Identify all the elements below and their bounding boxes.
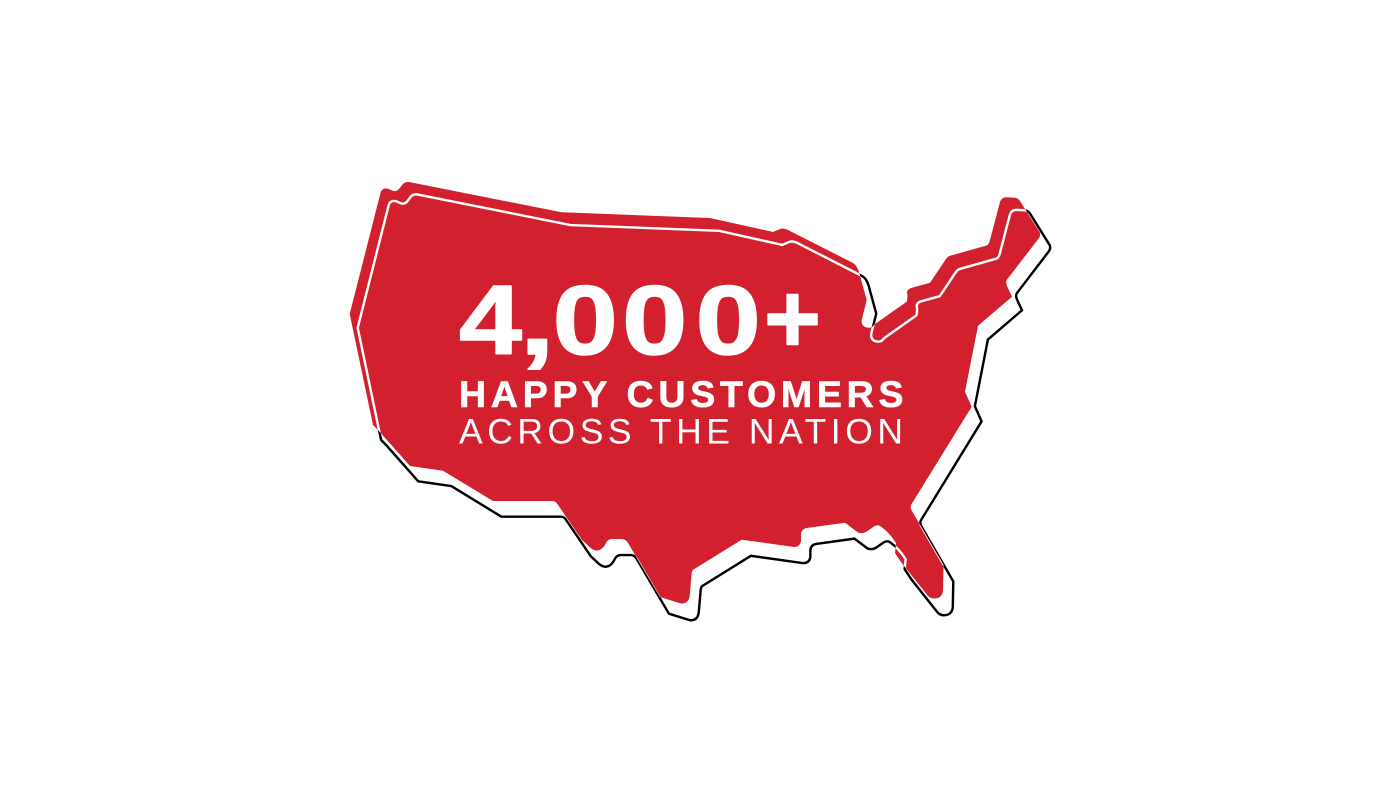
infographic [350, 182, 1052, 622]
headline number: , [520, 265, 555, 375]
headline number [459, 263, 821, 375]
subheading: across the nation: ACROSS THE NATION [459, 411, 903, 451]
headline number: 0 [696, 265, 761, 375]
headline number: 0 [552, 265, 618, 375]
headline number: 4 [459, 265, 522, 375]
headline number: 0 [622, 265, 687, 375]
headline number: + [764, 263, 821, 373]
map: red United States silhouette [350, 182, 1040, 604]
map outline: black offset contour [358, 194, 1050, 620]
subheading: happy customers: HAPPY CUSTOMERS [459, 373, 904, 415]
map outline: white contour inside the red shape [358, 194, 1050, 620]
